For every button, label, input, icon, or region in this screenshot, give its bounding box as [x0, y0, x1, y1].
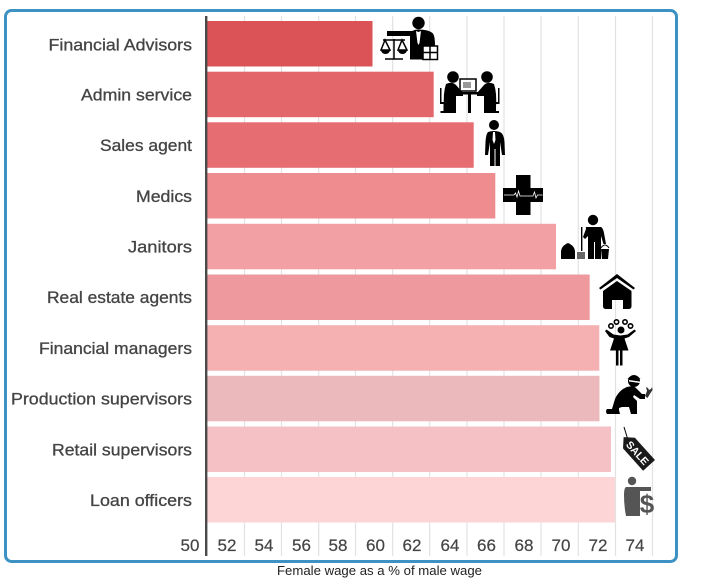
category labels: [11, 36, 192, 510]
axis tick labels: 62: [403, 536, 421, 555]
category labels: Sales agent: [100, 137, 192, 155]
icon: house: [599, 274, 635, 309]
icon: sale tag: SALE: [623, 439, 651, 468]
category labels: Financial managers: [39, 340, 192, 358]
bar: Financial managers: [207, 325, 599, 371]
bar: Medics: [207, 173, 495, 218]
bar chart: [207, 21, 615, 522]
axis tick labels: 50: [181, 536, 199, 555]
bar: Admin service: [207, 72, 434, 117]
vertical axis line: [205, 16, 207, 556]
bar: Janitors: [207, 224, 556, 269]
icon: loan officer with dollar sign: [624, 477, 655, 519]
bar: Sales agent: [207, 122, 474, 168]
axis tick labels: 52: [218, 536, 236, 555]
icon: sales agent: [485, 120, 505, 166]
category labels: Real estate agents: [47, 289, 192, 307]
icon: janitor: [561, 215, 609, 259]
axis tick labels: 56: [292, 536, 311, 555]
axis tick labels: [181, 536, 644, 555]
icon: two people at desk: [440, 71, 500, 113]
axis tick labels: 54: [255, 536, 273, 555]
icon: kneeling worker: [606, 375, 652, 414]
category labels: Production supervisors: [11, 390, 192, 408]
icon: sale tag: [618, 427, 655, 471]
axis title: Female wage as a % of male wage: [277, 564, 482, 578]
category labels: Loan officers: [90, 492, 192, 510]
icon: medical cross: [503, 175, 543, 215]
axis tick labels: 66: [477, 536, 496, 555]
axis tick labels: 60: [366, 536, 385, 555]
category labels: Medics: [136, 188, 192, 206]
axis tick labels: 74: [626, 536, 644, 555]
axis tick labels: 70: [552, 536, 570, 555]
axis tick labels: 58: [329, 536, 347, 555]
icon: loan officer with dollar sign: $: [640, 489, 655, 519]
bar: Real estate agents: [207, 274, 590, 320]
category labels: Janitors: [128, 238, 192, 256]
axis tick labels: 68: [515, 536, 533, 555]
axis tick labels: 64: [441, 536, 459, 555]
icon: woman juggling coins: [605, 320, 636, 366]
bar: Financial Advisors: [207, 21, 372, 66]
bar: Production supervisors: [207, 376, 600, 421]
icon: advisor with scales: [381, 17, 438, 60]
category labels: Financial Advisors: [48, 36, 192, 54]
bar: Loan officers: [207, 477, 615, 522]
category labels: Admin service: [81, 86, 192, 104]
bar: Retail supervisors: [207, 426, 611, 472]
category labels: Retail supervisors: [52, 442, 192, 460]
axis tick labels: 72: [589, 536, 607, 555]
